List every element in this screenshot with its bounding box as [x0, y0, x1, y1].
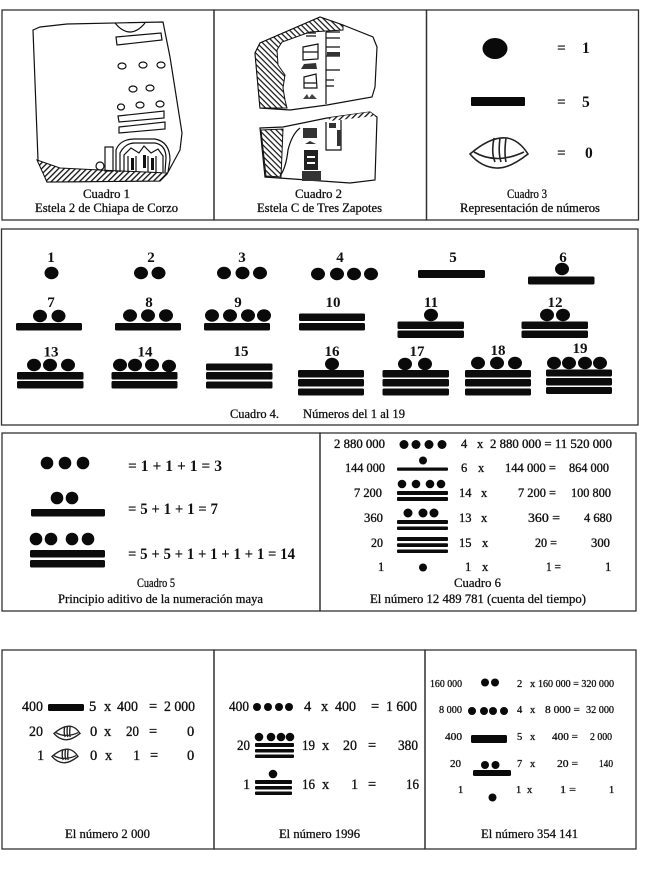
row: 20: x	[482, 536, 489, 550]
row: 1: 1	[605, 560, 611, 574]
row: 8 000: 8 000 =	[545, 705, 580, 716]
row: 2 880 000: 4	[461, 437, 468, 451]
row: 1: 1	[465, 560, 471, 574]
row: 400: 2 000	[164, 699, 195, 715]
row: 1: 1	[378, 560, 384, 574]
caption: Cuadro 2: Cuadro 2	[295, 186, 342, 201]
icon: shell equals 0: 0	[585, 145, 593, 162]
panel: El número 2 000	[2, 650, 214, 849]
row: 400: 5	[89, 699, 96, 715]
row: 7 200: 100 800	[571, 486, 611, 500]
row: 7 200: 7 200 =	[518, 486, 556, 500]
row: bar and two dots equals 7	[31, 492, 218, 518]
row: 144 000	[345, 456, 609, 475]
row: 144 000: 144 000	[345, 461, 385, 475]
row: 360: 360	[364, 511, 383, 525]
row: 1	[458, 785, 614, 802]
numeral 17	[382, 344, 449, 396]
row: 144 000: 6	[461, 461, 467, 475]
numeral 5: 5	[449, 250, 457, 266]
row: 400: 400 =	[552, 732, 578, 743]
row: 1 with shell: x	[105, 748, 113, 764]
numeral 7	[16, 295, 82, 330]
numeral 19	[546, 341, 612, 394]
numeral 14	[112, 344, 178, 388]
row: 400: 400	[229, 699, 249, 715]
caption: Estela 2 de Chiapa de Corzo: Estela 2 de Chiapa de Corzo	[35, 200, 178, 215]
row: 2 880 000: x	[477, 437, 484, 451]
row: 7 200: 14	[459, 486, 472, 500]
row: two bars and four dots equals 14: = 5 + 5 + 1 + 1 + 1 + 1 = 14	[128, 546, 295, 563]
row: 400: 4	[304, 699, 312, 715]
row: 20: 20 =	[535, 536, 557, 550]
numeral 6: 6	[559, 250, 567, 266]
row: 8 000: x	[530, 705, 536, 716]
numeral 19: 19	[572, 341, 588, 357]
row: 8 000: 4	[517, 705, 523, 716]
row: 160 000: 160 000	[430, 679, 462, 690]
row: 400: x	[321, 699, 329, 715]
caption: El número 2 000: El número 2 000	[65, 826, 150, 841]
row: 1 with shell	[37, 748, 194, 764]
row: 160 000: x	[530, 679, 536, 690]
panel: Cuadro 3	[426, 10, 638, 220]
row: 144 000: 144 000 =	[505, 461, 556, 475]
numeral 2	[134, 250, 166, 279]
row: 1 with shell: 1	[133, 748, 140, 764]
panel: Cuadro 2	[214, 10, 426, 220]
row: 360: x	[481, 511, 488, 525]
row: 1	[243, 770, 419, 795]
numeral 8	[115, 295, 181, 330]
row: 400: =	[371, 699, 379, 715]
row: 7 200: 7 200	[354, 486, 382, 500]
row: 2 880 000	[334, 437, 612, 451]
panel: Cuadro 1	[2, 10, 214, 220]
row: two bars and four dots equals 14	[30, 533, 295, 568]
row: 7 200	[354, 480, 611, 501]
icon: dot equals 1: 1	[582, 40, 590, 57]
numeral 4: 4	[336, 250, 344, 266]
numeral 13	[17, 344, 84, 388]
row: 20: x	[322, 738, 330, 754]
row: 144 000: x	[478, 461, 485, 475]
row: 20: 20	[237, 738, 250, 754]
caption: Cuadro 5: Cuadro 5	[137, 575, 175, 590]
numeral 2: 2	[147, 250, 155, 266]
row: 20: 20	[450, 759, 461, 770]
row: 400: 2 000	[590, 732, 612, 743]
row: 20: 19	[302, 738, 315, 754]
icon: bar equals 5: =	[557, 94, 566, 111]
row: 20 with shell: 20	[29, 724, 43, 740]
caption: El número 354 141: El número 354 141	[481, 826, 578, 841]
caption: Representación de números: Representación de números	[460, 200, 600, 215]
row: 1: 1 =	[546, 560, 561, 574]
row: 144 000: 864 000	[569, 461, 609, 475]
icon: shell equals 0	[470, 138, 593, 168]
numeral 15: 15	[234, 344, 248, 360]
row: 1: 1 =	[560, 785, 576, 796]
row: 1: x	[322, 777, 330, 793]
icon: dot equals 1	[482, 38, 590, 59]
row: 20: =	[368, 738, 376, 754]
row: 400: x	[530, 732, 536, 743]
row: 1 with shell: 0	[187, 748, 194, 764]
row: 1	[378, 560, 611, 574]
row: 160 000	[430, 678, 614, 690]
numeral 17: 17	[410, 344, 425, 360]
row: 8 000: 32 000	[586, 705, 614, 716]
numeral 5	[418, 250, 485, 278]
row: 20: 20	[343, 738, 357, 754]
row: 1: 16	[406, 777, 419, 793]
row: 1 with shell: 1	[37, 748, 44, 764]
row: 20	[237, 733, 418, 758]
panel: El número 1996	[214, 650, 425, 849]
panel: Cuadro 4, numbers 1 to 19	[2, 229, 638, 425]
row: 1: 1	[609, 785, 614, 796]
row: 2 880 000: 2 880 000 = 11 520 000	[490, 437, 612, 451]
row: 8 000: 8 000	[439, 705, 462, 716]
icon: shell equals 0: =	[557, 145, 566, 162]
caption: Cuadro 4	[230, 406, 405, 421]
row: 20 with shell: =	[149, 724, 157, 740]
row: 20: 380	[398, 738, 418, 754]
row: 1: x	[482, 560, 489, 574]
row: 400: 400	[117, 699, 138, 715]
row: 1: 16	[302, 777, 315, 793]
row: 20 with shell: 0	[187, 724, 194, 740]
numeral 4	[311, 250, 378, 280]
numeral 18	[465, 343, 531, 396]
caption: Cuadro 6: Cuadro 6	[454, 575, 501, 590]
row: 20 with shell: x	[104, 724, 112, 740]
row: 20 with shell: 0	[90, 724, 97, 740]
row: 20	[450, 759, 613, 776]
numeral 9: 9	[234, 295, 242, 311]
row: 360	[364, 508, 612, 530]
icon: bar equals 5	[471, 94, 590, 111]
row: 400: =	[149, 699, 157, 715]
panel: Cuadro 5, additive principle	[2, 433, 320, 611]
row: 8 000	[439, 705, 614, 716]
row: 20 with shell: 20	[126, 724, 139, 740]
row: 400	[229, 699, 417, 715]
numeral 3: 3	[238, 250, 246, 266]
icon: Estela 2 de Chiapa de Corzo	[33, 22, 182, 182]
row: 1: 1	[516, 785, 521, 796]
numeral 14: 14	[138, 344, 153, 360]
icon: Estela C de Tres Zapotes, upper fragment	[255, 17, 377, 110]
row: 20: 15	[459, 536, 472, 550]
numeral 6	[528, 250, 594, 284]
row: 400	[445, 732, 612, 743]
row: 1: =	[368, 777, 376, 793]
row: 1: 1	[458, 785, 463, 796]
row: 360: 360 =	[528, 511, 560, 525]
caption: Cuadro 4: Números del 1 al 19	[303, 406, 405, 421]
numeral 7: 7	[47, 295, 55, 311]
row: 400: 400	[335, 699, 356, 715]
numeral 3	[217, 250, 267, 279]
caption: Estela C de Tres Zapotes: Estela C de Tres Zapotes	[257, 200, 382, 215]
caption: Cuadro 4: Cuadro 4.	[230, 406, 279, 421]
numeral 12: 12	[548, 295, 562, 311]
row: 400: x	[104, 699, 112, 715]
row: 20: 140	[599, 759, 613, 770]
caption: Principio aditivo de la numeración maya: Principio aditivo de la numeración maya	[58, 591, 263, 606]
numeral 13: 13	[44, 344, 58, 360]
row: 20: 300	[591, 536, 610, 550]
row: 400: 5	[517, 732, 522, 743]
row: 400: 400	[445, 732, 462, 743]
row: 360: 13	[459, 511, 472, 525]
row: 1 with shell: 0	[90, 748, 97, 764]
caption: Cuadro 3: Cuadro 3	[507, 186, 547, 201]
row: 360: 4 680	[584, 511, 612, 525]
caption: El número 1996: El número 1996	[279, 826, 360, 841]
numeral 18: 18	[490, 343, 506, 359]
row: 400: 400	[22, 699, 43, 715]
row: 1: 1	[243, 777, 250, 793]
row: 20 with shell	[29, 724, 194, 740]
numeral 15	[206, 344, 272, 388]
row: 160 000: 2	[517, 679, 522, 690]
caption: Cuadro 1: Cuadro 1	[83, 186, 130, 201]
row: three dots equals 3: = 1 + 1 + 1 = 3	[128, 458, 222, 475]
panel: Cuadro 6, number 12 489 781	[320, 433, 636, 611]
row: 20	[371, 536, 610, 553]
row: 160 000: 160 000 = 320 000	[538, 679, 614, 690]
numeral 11: 11	[424, 295, 438, 311]
row: 20: 20 =	[557, 759, 578, 770]
numeral 12	[522, 295, 588, 338]
row: 1 with shell: =	[150, 748, 158, 764]
row: 2 880 000: 2 880 000	[334, 437, 385, 451]
caption: El número 12 489 781 (cuenta del tiempo): El número 12 489 781 (cuenta del tiempo)	[370, 591, 586, 606]
numeral 1	[44, 250, 58, 279]
row: 20: 20	[371, 536, 383, 550]
row: 7 200: x	[481, 486, 488, 500]
row: 1: x	[527, 785, 533, 796]
numeral 10	[299, 295, 365, 330]
numeral 8: 8	[145, 295, 153, 311]
row: 20: x	[530, 759, 536, 770]
row: 400: 1 600	[386, 699, 417, 715]
icon: dot equals 1: =	[557, 40, 566, 57]
row: three dots equals 3	[41, 457, 222, 475]
row: 400	[22, 699, 195, 715]
row: 1: 1	[351, 777, 358, 793]
numeral 9	[204, 295, 271, 330]
row: bar and two dots equals 7: = 5 + 1 + 1 = 7	[128, 501, 218, 518]
numeral 16	[298, 344, 364, 396]
icon: bar equals 5: 5	[582, 94, 590, 111]
numeral 10: 10	[326, 295, 340, 311]
numeral 1: 1	[47, 250, 55, 266]
numeral 11	[398, 295, 464, 338]
icon: Estela C de Tres Zapotes, lower fragment	[260, 112, 377, 183]
panel: El número 354 141	[425, 650, 636, 849]
row: 20: 7	[517, 759, 522, 770]
numeral 16: 16	[324, 344, 340, 360]
